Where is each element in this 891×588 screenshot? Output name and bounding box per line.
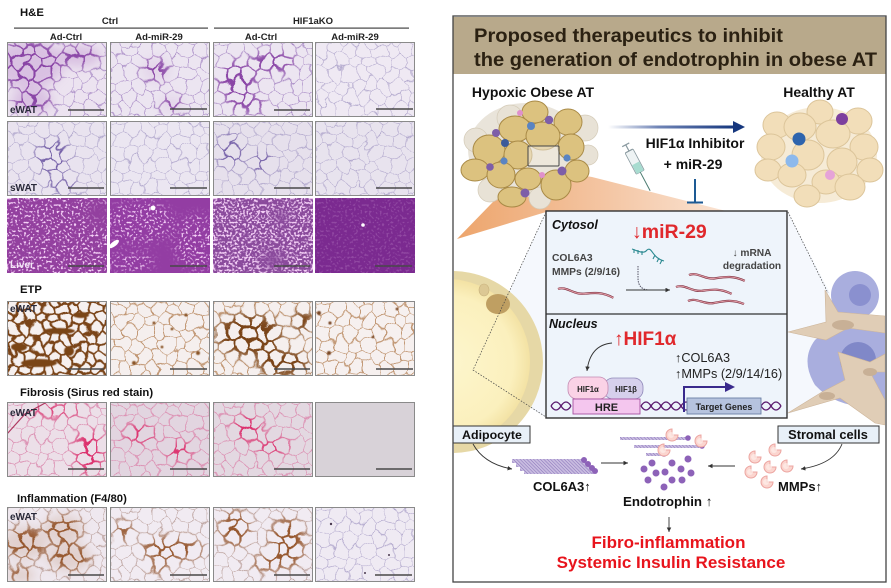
inset box [546, 211, 787, 418]
label: mRNA degradation [723, 248, 781, 272]
arrow: translation [626, 266, 670, 290]
arrow: adipocyte to COL6A3 [473, 444, 512, 469]
label: upregulated genes: ↑COL6A3 [675, 351, 730, 365]
endotrophin cleavage [620, 429, 707, 490]
HRE box [573, 399, 640, 414]
panel: Liver Ctrl Ad-Ctrl [7, 198, 107, 273]
panel: Inflammation Ctrl Ad-miR-29 [110, 507, 210, 582]
column label: Ad-miR-29: Ad-miR-29 [331, 32, 379, 43]
hypoxic obese adipose cluster [461, 101, 598, 209]
label: Endotrophin up: Endotrophin ↑ [623, 494, 712, 509]
panel: Liver Ctrl Ad-Ctrl: Liver [10, 260, 34, 271]
panel border [453, 16, 886, 582]
heading: H&E: H&E [20, 7, 44, 19]
label: genes: MMPs (2/9/16) [552, 267, 620, 278]
label: mRNA degradation: ↓ mRNA [732, 248, 772, 259]
arrow: endotrophin to outcome [668, 517, 670, 532]
panel: ETP Ctrl Ad-Ctrl [7, 301, 107, 376]
healthy adipose cluster [755, 100, 883, 207]
title banner: the generation of endotrophin in obese AT [474, 49, 877, 71]
panel: proposed therapeutics schematic [452, 15, 887, 583]
HIF1 alpha pill: HIF1α [577, 385, 599, 394]
MMP enzymes [745, 444, 793, 488]
adipocyte cell [454, 271, 543, 453]
title banner: Proposed therapeutics to inhibit [474, 25, 784, 47]
panel: Inflammation Ctrl Ad-Ctrl: eWAT [10, 512, 37, 523]
selection box [528, 146, 559, 166]
HIF1 beta pill [604, 378, 643, 399]
icon: syringe [622, 143, 654, 193]
orange zoom wedge [457, 176, 724, 239]
arrow: stromal to MMPs [801, 444, 842, 469]
stromal cells illustration [788, 271, 885, 425]
panel: Inflammation HIF1aKO Ad-miR-29 [315, 507, 415, 582]
heading: Hypoxic Obese AT: Hypoxic Obese AT [472, 84, 595, 100]
panel: eWAT Ctrl Ad-Ctrl: eWAT [10, 105, 37, 116]
panel: sWAT HIF1aKO Ad-miR-29 [315, 121, 415, 196]
icon: miRNA [632, 249, 664, 264]
treatment label: HIF1α Inhibitor [646, 135, 745, 151]
panel: zoomed inset [546, 211, 787, 418]
panel: Fibrosis Ctrl Ad-Ctrl: eWAT [10, 408, 37, 419]
label: upregulated genes [675, 351, 782, 381]
HIF1 alpha pill [568, 377, 608, 399]
panel: ETP Ctrl Ad-miR-29 [110, 301, 210, 376]
label box: Stromal cells: Stromal cells [788, 427, 868, 442]
label box: Adipocyte: Adipocyte [462, 428, 522, 442]
heading: Healthy AT: Healthy AT [783, 84, 855, 100]
DNA helix [551, 402, 781, 410]
outcome text: Fibro-inflammation [592, 533, 745, 552]
panel: ETP HIF1aKO Ad-miR-29 [315, 301, 415, 376]
group header: Ctrl: Ctrl [102, 16, 118, 27]
panel: ETP Ctrl Ad-Ctrl: eWAT [10, 304, 37, 315]
label: Nucleus: Nucleus [549, 317, 598, 331]
label box: Stromal cells [778, 426, 879, 443]
label: genes: COL6A3 [552, 253, 593, 264]
heading: Inflammation: Inflammation (F4/80) [17, 493, 127, 505]
panel: sWAT Ctrl Ad-miR-29 [110, 121, 210, 196]
label: Cytosol: Cytosol [552, 218, 598, 232]
label: upregulated genes: ↑MMPs (2/9/14/16) [675, 367, 782, 381]
outcome text: Systemic Insulin Resistance [557, 553, 785, 572]
column label: Ad-Ctrl: Ad-Ctrl [50, 32, 82, 43]
label: COL6A3 up: COL6A3↑ [533, 479, 591, 494]
dotted zoom guide: right [788, 212, 828, 293]
label: down miR-29: ↓miR-29 [632, 221, 707, 243]
inhibition bar [687, 179, 703, 202]
group header: HIF1aKO: HIF1aKO [293, 16, 333, 27]
panel: eWAT Ctrl Ad-Ctrl [7, 42, 107, 117]
panel: Liver HIF1aKO Ad-Ctrl [213, 198, 313, 273]
arrow: COL6A3 to endotrophin [601, 462, 628, 464]
treatment label [646, 135, 745, 172]
left figure: histology panels [0, 7, 435, 588]
panel: eWAT HIF1aKO Ad-miR-29 [315, 42, 415, 117]
panel: eWAT HIF1aKO Ad-Ctrl [213, 42, 313, 117]
label box: Adipocyte [453, 426, 530, 443]
nucleus compartment [549, 317, 782, 414]
panel: eWAT Ctrl Ad-miR-29 [110, 42, 210, 117]
arrow: MMPs to endotrophin [708, 465, 735, 467]
label: genes [552, 253, 620, 278]
panel: Fibrosis Ctrl Ad-miR-29 [110, 402, 210, 477]
panel: sWAT Ctrl Ad-Ctrl [7, 121, 107, 196]
panel: ETP HIF1aKO Ad-Ctrl [213, 301, 313, 376]
COL6A3 fibres [512, 457, 598, 474]
faint zoom region background [510, 214, 830, 417]
panel: sWAT HIF1aKO Ad-Ctrl [213, 121, 313, 196]
label: mRNA degradation: degradation [723, 261, 781, 272]
HRE box: HRE [595, 402, 618, 414]
outcome text [557, 533, 785, 572]
panel: Inflammation Ctrl Ad-Ctrl [7, 507, 107, 582]
heading: Fibrosis: Fibrosis (Sirus red stain) [20, 387, 153, 399]
target genes box [687, 398, 761, 414]
treatment label: + miR-29 [664, 156, 723, 172]
arrow: promoter [684, 382, 735, 412]
panel: Fibrosis HIF1aKO Ad-Ctrl [213, 402, 313, 477]
panel: Inflammation HIF1aKO Ad-Ctrl [213, 507, 313, 582]
panel background [453, 16, 886, 582]
HIF1 beta pill: HIF1β [615, 385, 637, 394]
dotted zoom guide: left [473, 212, 546, 417]
panel: Fibrosis Ctrl Ad-Ctrl [7, 402, 107, 477]
panel: sWAT Ctrl Ad-Ctrl: sWAT [10, 183, 37, 194]
arrow: HIF1a to complex [587, 343, 612, 371]
target genes box: Target Genes [696, 402, 752, 412]
panel: Liver Ctrl Ad-miR-29 [110, 198, 210, 273]
label: up HIF1alpha: ↑HIF1α [614, 329, 677, 350]
panel: Liver HIF1aKO Ad-miR-29 [315, 198, 415, 273]
cytosol compartment [552, 218, 781, 304]
panel: Fibrosis HIF1aKO Ad-miR-29 [315, 402, 415, 477]
mRNA strands [558, 274, 745, 304]
title banner [453, 17, 886, 74]
column label: Ad-miR-29: Ad-miR-29 [135, 32, 183, 43]
heading: ETP: ETP [20, 284, 42, 296]
arrow: to healthy AT [608, 121, 745, 133]
label: MMPs up: MMPs↑ [778, 479, 822, 494]
column label: Ad-Ctrl: Ad-Ctrl [245, 32, 277, 43]
